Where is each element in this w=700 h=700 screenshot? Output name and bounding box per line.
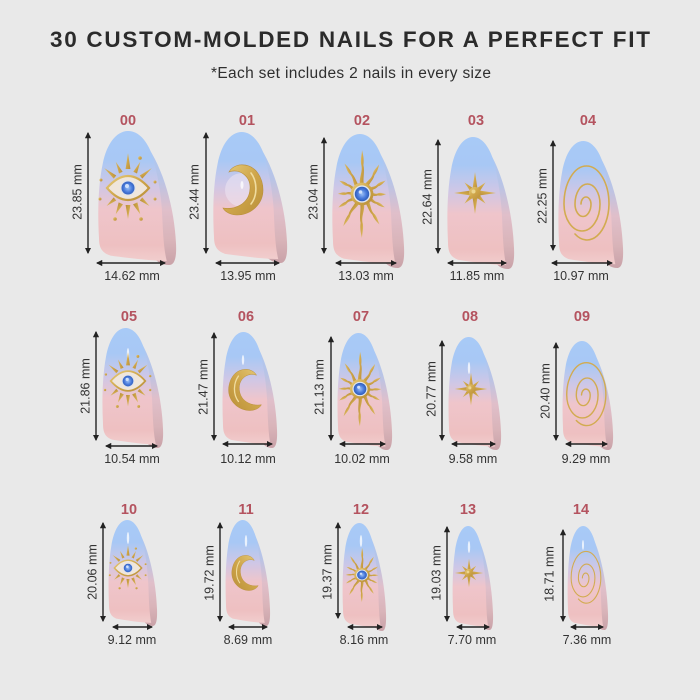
nail size 06 (196, 309, 277, 466)
nail size 05: 10.54 mm (104, 452, 160, 466)
subtitle: *Each set includes 2 nails in every size (211, 65, 491, 82)
nail size 07: 21.13 mm (312, 359, 326, 415)
nail size 02: 13.03 mm (338, 269, 394, 283)
nail size 08: 9.58 mm (449, 452, 497, 466)
nail size 05: 05 (121, 309, 137, 325)
nail size 05: 21.86 mm (78, 358, 92, 414)
nail size 02: 23.04 mm (306, 164, 320, 220)
nail size 01: 01 (239, 113, 255, 129)
nail size 11: 11 (238, 502, 254, 518)
nail size 14: 7.36 mm (563, 633, 611, 647)
nail size 06: 21.47 mm (196, 359, 210, 415)
nail size 02 (306, 113, 404, 283)
nail size 10: 10 (121, 502, 137, 518)
nail size 01 (188, 113, 287, 283)
nail size 12: 12 (353, 502, 369, 518)
nail size 01: 23.44 mm (188, 164, 202, 220)
nail size 08 (424, 309, 501, 466)
nail size 11: 19.72 mm (202, 545, 216, 601)
nail size 12: 19.37 mm (320, 544, 334, 600)
nail size 00 (70, 113, 176, 283)
nail size 14 (542, 502, 611, 647)
nail size 09 (538, 309, 613, 466)
nail size 14: 14 (573, 502, 589, 518)
nail size 02: 02 (354, 113, 370, 129)
nail size 09: 09 (574, 309, 590, 325)
nail size 00: 23.85 mm (70, 164, 84, 220)
nail size 13: 19.03 mm (430, 545, 444, 601)
nail size 03 (420, 113, 514, 283)
nail size 11: 8.69 mm (224, 633, 272, 647)
nail size 04: 04 (580, 113, 596, 129)
nail size 11 (202, 502, 272, 647)
nail size 04: 22.25 mm (536, 168, 550, 224)
nail size 04: 10.97 mm (553, 269, 609, 283)
nail size 07 (312, 309, 392, 466)
nail size 12: 8.16 mm (340, 633, 388, 647)
nail size 08: 08 (462, 309, 478, 325)
nail size 12 (320, 502, 388, 647)
nail size 10: 9.12 mm (108, 633, 156, 647)
nail size 13 (430, 502, 496, 647)
nail size 13: 13 (460, 502, 476, 518)
nail size 03: 22.64 mm (420, 169, 434, 225)
nail size 08: 20.77 mm (424, 361, 438, 417)
nail size 07: 10.02 mm (334, 452, 390, 466)
nail size 09: 9.29 mm (562, 452, 610, 466)
nail size 10 (86, 502, 157, 647)
nail size 09: 20.40 mm (538, 363, 552, 419)
nail size 05 (78, 309, 163, 466)
nail size 13: 7.70 mm (448, 633, 496, 647)
nail size 10: 20.06 mm (86, 544, 100, 600)
nail size 06: 06 (238, 309, 254, 325)
nail size 03: 03 (468, 113, 484, 129)
nail size 00: 00 (120, 113, 136, 129)
nail size 00: 14.62 mm (104, 269, 160, 283)
nail size 01: 13.95 mm (220, 269, 276, 283)
title: 30 CUSTOM-MOLDED NAILS FOR A PERFECT FIT (50, 27, 650, 52)
nail size 14: 18.71 mm (542, 546, 556, 602)
nail size 07: 07 (353, 309, 369, 325)
nail size 04 (536, 113, 623, 283)
nail size 06: 10.12 mm (220, 452, 276, 466)
nail size 03: 11.85 mm (450, 269, 504, 283)
